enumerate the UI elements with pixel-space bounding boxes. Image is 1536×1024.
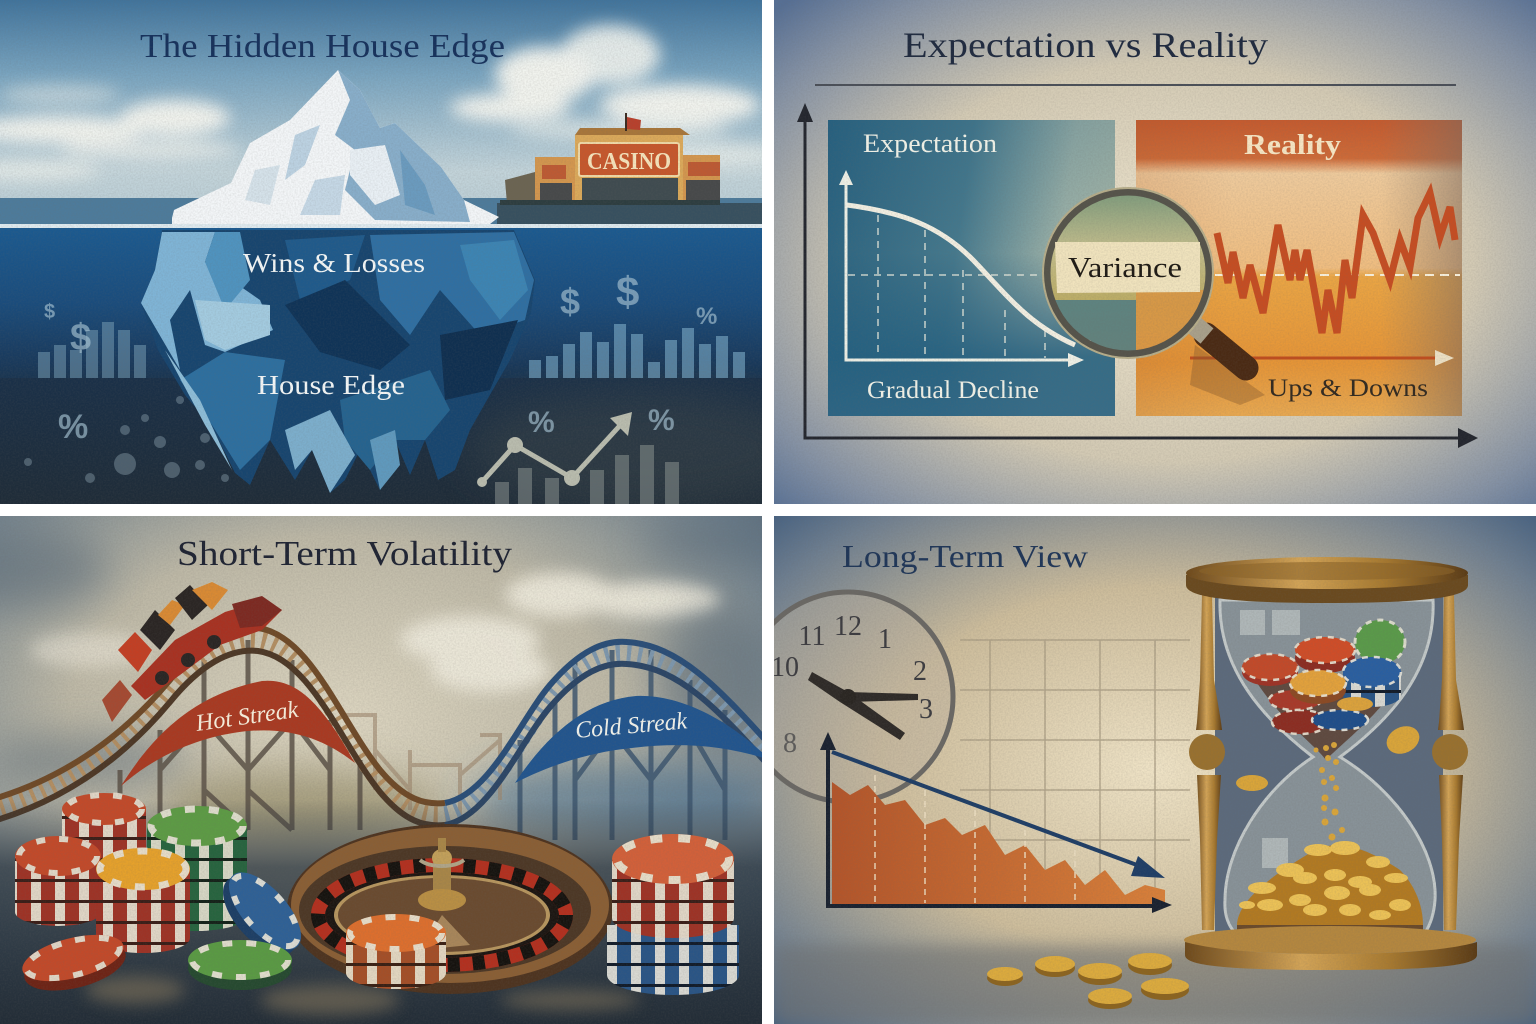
variance label bbox=[1055, 242, 1200, 293]
dark core bbox=[285, 280, 410, 370]
label: wins and losses: Wins & Losses bbox=[243, 248, 425, 278]
panel: Short-Term Volatility bbox=[0, 516, 800, 1024]
base bbox=[1184, 926, 1476, 954]
currency symbols: % bbox=[58, 408, 88, 446]
falling coins bbox=[1236, 721, 1424, 840]
panel: Long-Term View bbox=[743, 516, 1536, 1024]
panel: Expectation vs Reality bbox=[774, 0, 1536, 504]
panel: The Hidden House Edge bbox=[0, 0, 810, 510]
clock: 11 bbox=[799, 621, 825, 652]
coin pile bbox=[1237, 841, 1423, 930]
panel background bbox=[774, 516, 1536, 1024]
roulette wheel bbox=[287, 824, 613, 994]
sky bbox=[0, 516, 762, 1024]
clouds bbox=[0, 25, 785, 180]
blue supports bbox=[520, 650, 725, 840]
cold streak banner: Cold Streak bbox=[574, 708, 688, 744]
sub-panel: expectation bbox=[828, 120, 1115, 416]
currency symbols: $ bbox=[560, 281, 580, 322]
ground haze bbox=[160, 770, 440, 850]
caption: gradual decline: Gradual Decline bbox=[867, 377, 1039, 404]
loose chip red bbox=[18, 926, 131, 1000]
deep water bbox=[0, 378, 762, 504]
lower facets bbox=[180, 352, 285, 470]
currency symbols: $ bbox=[616, 268, 639, 315]
panel background bbox=[774, 0, 1536, 504]
casino island bbox=[497, 203, 762, 225]
casino building bbox=[500, 113, 720, 205]
horizontal gutter bbox=[0, 504, 1536, 516]
orange stack bbox=[96, 869, 190, 953]
variance label: Variance bbox=[1068, 252, 1182, 284]
far sea bbox=[0, 198, 762, 224]
glass bbox=[1220, 600, 1435, 933]
sea underwater bbox=[0, 227, 762, 379]
left post ball bbox=[1189, 734, 1225, 770]
clock: 10 bbox=[771, 652, 799, 683]
clock: 3 bbox=[919, 694, 933, 725]
brown coaster track bbox=[0, 628, 445, 825]
glass highlights bbox=[1240, 610, 1300, 868]
currency symbols: % bbox=[528, 406, 555, 439]
outer axes bbox=[805, 115, 1470, 438]
hot streak banner: Hot Streak bbox=[193, 697, 300, 737]
top cap bbox=[1186, 575, 1468, 603]
currency symbols: % bbox=[648, 404, 675, 437]
coaster supports bbox=[120, 640, 360, 830]
light upper-left facets bbox=[141, 232, 273, 370]
loose chip green bbox=[188, 940, 292, 990]
floor bbox=[774, 945, 1536, 1024]
blue coaster track bbox=[445, 642, 770, 825]
iceberg underwater bbox=[141, 230, 535, 493]
loose coins bbox=[987, 953, 1189, 1009]
red back stack bbox=[62, 809, 146, 864]
coaster train bbox=[102, 582, 282, 722]
label: house edge: House Edge bbox=[257, 370, 405, 400]
title rule bbox=[815, 84, 1456, 86]
waterline bbox=[0, 224, 762, 228]
decline chart bbox=[820, 732, 1172, 913]
reality chart bbox=[1140, 193, 1460, 366]
bottom right chart bbox=[477, 412, 679, 504]
clouds bbox=[30, 573, 720, 692]
backing bbox=[1215, 595, 1443, 935]
right post bbox=[1438, 595, 1464, 930]
title: Long-Term View bbox=[842, 538, 1088, 574]
right post ball bbox=[1432, 734, 1468, 770]
seabed texture bbox=[484, 390, 762, 504]
dust bbox=[85, 976, 640, 1015]
red left stack bbox=[15, 856, 101, 926]
magnifying glass bbox=[1040, 188, 1265, 405]
bubbles bbox=[24, 396, 229, 483]
cold streak banner bbox=[515, 696, 770, 783]
caption: ups and downs: Ups & Downs bbox=[1268, 375, 1428, 402]
sub-panel: reality bbox=[1136, 120, 1462, 416]
clock: 8 bbox=[783, 728, 797, 759]
expectation chart bbox=[839, 170, 1084, 367]
label: CASINO sign: CASINO bbox=[587, 149, 671, 175]
hot streak banner bbox=[121, 681, 355, 786]
currency symbols bbox=[44, 268, 717, 446]
clock: 2 bbox=[913, 656, 927, 687]
clock bbox=[743, 592, 953, 802]
currency symbols: % bbox=[696, 303, 717, 330]
chips in top bulb bbox=[1242, 620, 1405, 760]
green stack bbox=[147, 826, 247, 931]
iceberg above water bbox=[172, 70, 499, 224]
loose chip blue bbox=[210, 861, 313, 967]
sky bbox=[0, 0, 762, 215]
vertical gutter bbox=[762, 0, 774, 1024]
right bars bbox=[529, 324, 745, 378]
ground bbox=[0, 800, 762, 1024]
title: Expectation vs Reality bbox=[903, 25, 1268, 65]
title: Short-Term Volatility bbox=[177, 534, 513, 573]
chip stack center bbox=[346, 914, 446, 989]
currency symbols: $ bbox=[44, 301, 55, 323]
left bars bbox=[38, 322, 146, 378]
reality heading: Reality bbox=[1244, 130, 1341, 161]
grey storm clouds bbox=[0, 520, 800, 785]
mid-blue right facets bbox=[370, 232, 534, 335]
clock: 12 bbox=[834, 611, 862, 642]
title: The Hidden House Edge bbox=[140, 28, 505, 65]
hourglass bbox=[1184, 557, 1477, 970]
expectation heading: Expectation bbox=[863, 129, 997, 158]
background trestles bbox=[345, 715, 500, 815]
grid bbox=[960, 640, 1190, 900]
chip stacks right bbox=[607, 834, 739, 995]
chip stacks left bbox=[15, 793, 313, 1000]
clock: 1 bbox=[878, 624, 892, 655]
currency symbols: $ bbox=[70, 317, 91, 359]
left post bbox=[1196, 595, 1222, 930]
